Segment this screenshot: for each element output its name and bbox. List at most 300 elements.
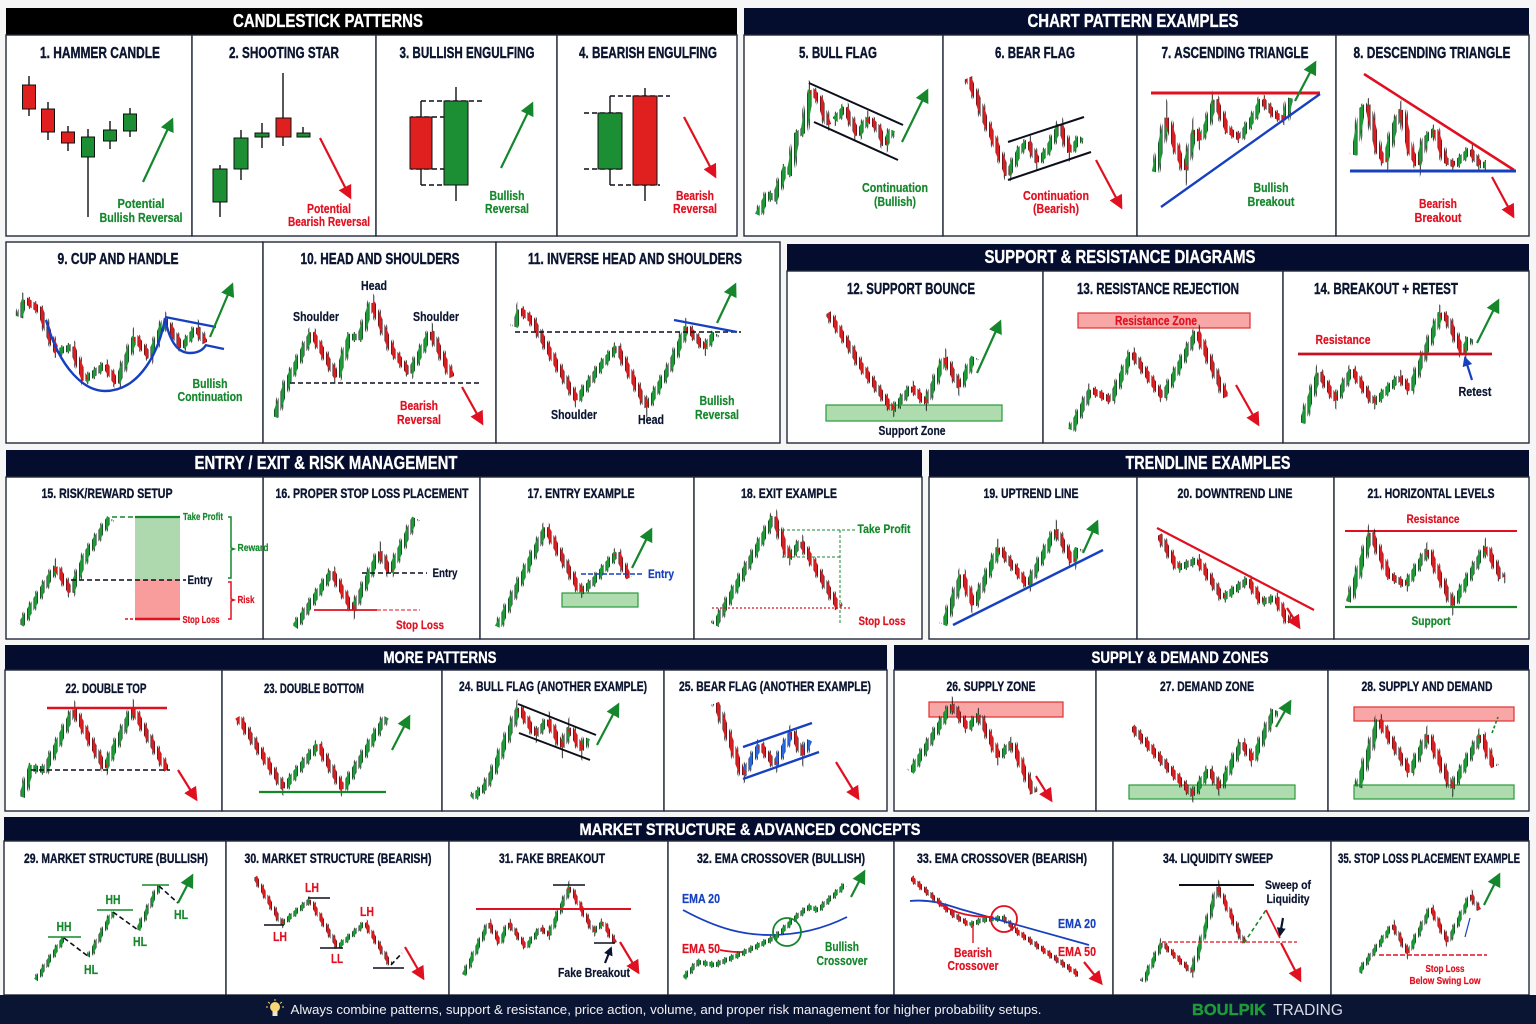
ema 50 curve	[937, 902, 993, 917]
panel: entry example	[480, 477, 694, 639]
label: Bullish	[1254, 180, 1289, 195]
label	[862, 180, 928, 209]
trend line	[1157, 528, 1314, 610]
title: 30. MARKET STRUCTURE (BEARISH)	[244, 850, 432, 866]
panel: demand zone	[1096, 670, 1328, 811]
crossover circle	[991, 906, 1017, 932]
title: 14. BREAKOUT + RETEST	[1314, 281, 1458, 298]
heading: TRENDLINE EXAMPLES	[1126, 453, 1290, 473]
candles	[944, 530, 1078, 625]
heading	[5, 645, 887, 670]
label	[485, 188, 529, 216]
label: Reversal	[397, 412, 441, 427]
panel: uptrend line	[929, 477, 1137, 639]
label: Reversal	[673, 201, 717, 216]
label: Breakout	[1248, 194, 1295, 209]
zone	[562, 593, 638, 607]
arrow	[1295, 63, 1315, 101]
label: Below Swing Low	[1410, 976, 1481, 987]
label: Sweep of	[1265, 878, 1312, 892]
label	[1023, 188, 1089, 216]
resistance zone: Resistance Zone	[1115, 313, 1197, 328]
arrow	[1484, 875, 1499, 905]
panel: market structure bullish	[4, 841, 226, 995]
panel: trendline examples	[929, 450, 1529, 639]
title: 26. SUPPLY ZONE	[946, 678, 1036, 694]
neckline	[515, 331, 741, 333]
label: Continuation	[178, 389, 243, 404]
high level	[1179, 884, 1254, 886]
crossover circle	[773, 918, 801, 946]
zones	[1354, 707, 1514, 799]
arrow	[1276, 702, 1290, 727]
title: 33. EMA CROSSOVER (BEARISH)	[917, 850, 1087, 866]
label: Bearish	[400, 398, 438, 413]
panel: breakout and retest	[1283, 271, 1529, 443]
candles	[715, 517, 839, 625]
title: 34. LIQUIDITY SWEEP	[1163, 850, 1273, 866]
panel: support bounce	[787, 271, 1043, 443]
candles	[515, 310, 715, 407]
panel: exit example	[694, 477, 922, 639]
candles	[1159, 535, 1289, 623]
label: Crossover	[816, 953, 868, 968]
stop line	[1379, 954, 1487, 956]
candles	[584, 88, 670, 201]
label	[1248, 180, 1295, 209]
candles	[716, 703, 809, 775]
stop loss label: Stop Loss	[396, 618, 444, 632]
arrow	[620, 942, 638, 972]
retest arrow	[1465, 358, 1472, 380]
panel: fake breakout	[449, 841, 668, 995]
heading: SUPPLY & DEMAND ZONES	[1092, 648, 1268, 667]
risk bracket: Risk	[238, 595, 255, 606]
candles	[1132, 710, 1275, 795]
neckline	[290, 382, 479, 384]
ema 20 curve	[910, 901, 1089, 945]
sweep path	[1244, 910, 1280, 943]
title: 31. FAKE BREAKOUT	[499, 850, 605, 866]
zone	[1129, 785, 1295, 799]
resistance label: Resistance	[1316, 332, 1370, 347]
swing labels: LH	[305, 880, 319, 895]
heading: ENTRY / EXIT & RISK MANAGEMENT	[194, 453, 458, 473]
title: 28. SUPPLY AND DEMAND	[1362, 678, 1492, 694]
candles	[1359, 895, 1479, 972]
stop line	[712, 607, 851, 609]
target lines	[777, 530, 857, 625]
panel: ema crossover bearish	[894, 841, 1113, 995]
resistance line	[476, 908, 631, 910]
title: 15. RISK/REWARD SETUP	[42, 485, 172, 501]
panel: reversal patterns row	[6, 242, 780, 443]
swing dashes	[64, 886, 178, 957]
title: 1. HAMMER CANDLE	[40, 45, 160, 62]
label: Bullish Reversal	[100, 210, 182, 225]
label: Stop Loss	[1426, 964, 1465, 975]
arrow	[851, 872, 864, 897]
support zone	[826, 405, 1002, 421]
brand: TRADING	[1273, 1002, 1343, 1019]
support label: Support	[1412, 614, 1450, 628]
title: 19. UPTREND LINE	[984, 485, 1078, 501]
arrow	[1281, 943, 1300, 980]
ema labels: EMA 50	[682, 941, 720, 956]
feature labels: Head	[638, 412, 664, 427]
title: 23. DOUBLE BOTTOM	[264, 680, 364, 696]
candles	[1302, 313, 1470, 423]
heading: MARKET STRUCTURE & ADVANCED CONCEPTS	[580, 820, 920, 839]
label: Bullish	[825, 939, 859, 954]
title: 2. SHOOTING STAR	[229, 45, 339, 62]
heading	[929, 450, 1529, 477]
swing labels: HL	[133, 934, 147, 949]
panel: candlestick patterns	[6, 8, 737, 236]
feature labels: Shoulder	[413, 309, 459, 324]
arrow	[632, 530, 651, 568]
title: 32. EMA CROSSOVER (BULLISH)	[697, 850, 865, 866]
candles	[1143, 887, 1244, 982]
brand: BOULPIK	[1192, 1002, 1266, 1019]
title: 29. MARKET STRUCTURE (BULLISH)	[24, 850, 208, 866]
level labels: Take Profit	[858, 522, 911, 536]
label: Bullish	[490, 188, 525, 203]
label	[288, 201, 370, 229]
candles	[911, 878, 1079, 975]
candles	[498, 528, 629, 627]
arrow	[1236, 385, 1258, 424]
brand	[1192, 1002, 1343, 1019]
flag lines	[518, 704, 596, 760]
resistance line	[47, 707, 167, 709]
label: Crossover	[948, 958, 998, 973]
ema 50 curve	[720, 950, 743, 952]
arrow	[405, 947, 423, 978]
heading: CHART PATTERN EXAMPLES	[1028, 11, 1238, 31]
candles	[828, 313, 974, 410]
risk bracket	[228, 582, 255, 619]
ema labels: EMA 20	[1058, 916, 1096, 931]
trend line	[953, 550, 1103, 625]
candles	[472, 708, 587, 798]
arrow	[1083, 522, 1097, 553]
heading: candlestick patterns: CANDLESTICK PATTERNS	[233, 11, 423, 31]
label	[178, 376, 243, 404]
panel: more patterns	[5, 645, 887, 811]
support line	[259, 791, 386, 793]
label	[1414, 196, 1462, 225]
entry label: Entry	[648, 567, 674, 581]
arrow	[1096, 160, 1121, 207]
retest label: Retest	[1458, 384, 1492, 399]
heading	[894, 645, 1529, 670]
candles	[295, 518, 415, 627]
arrow	[717, 285, 735, 323]
panel: bearish engulfing	[557, 35, 737, 236]
title: 17. ENTRY EXAMPLE	[528, 485, 634, 501]
reward bracket	[228, 517, 268, 578]
level labels: Stop Loss	[858, 614, 906, 628]
swing labels	[56, 892, 188, 977]
candles	[21, 518, 110, 625]
label	[695, 393, 739, 422]
label: Bearish	[1419, 196, 1457, 211]
swing labels: HH	[106, 892, 120, 907]
arrow	[1477, 301, 1498, 343]
candles	[238, 717, 386, 789]
candles	[1071, 332, 1226, 430]
feature labels: Shoulder	[551, 407, 597, 422]
entry marker	[1465, 918, 1470, 937]
ema labels: EMA 20	[682, 891, 720, 906]
panel: descending triangle	[1336, 35, 1529, 236]
swing labels: HL	[174, 907, 188, 922]
panel: bull flag	[744, 35, 943, 236]
candles	[213, 73, 310, 217]
resistance label: Resistance	[1406, 512, 1460, 526]
title: 18. EXIT EXAMPLE	[741, 485, 837, 501]
label: Bullish	[192, 376, 228, 391]
panel: supply zone	[894, 670, 1096, 811]
panel: horizontal levels	[1334, 477, 1529, 639]
flag lines	[809, 83, 903, 160]
swing labels: HL	[84, 962, 98, 977]
flag lines	[1008, 117, 1091, 180]
panel: support and resistance diagrams	[787, 244, 1529, 443]
arrow	[178, 876, 192, 903]
candles	[22, 709, 167, 797]
title: 5. BULL FLAG	[799, 45, 877, 62]
label: Potential	[118, 196, 164, 211]
panel: cup and handle	[6, 242, 263, 443]
label: (Bearish)	[1033, 201, 1079, 216]
panel: entry exit and risk management	[6, 450, 922, 639]
arrow	[1492, 177, 1513, 216]
arrow	[1287, 608, 1299, 627]
panel: supply and demand zones	[894, 645, 1529, 811]
arrow	[836, 762, 858, 798]
candles	[911, 705, 1034, 793]
pointer	[972, 923, 974, 943]
ema labels	[1058, 916, 1096, 959]
arrow	[1036, 776, 1051, 800]
footer note: Always combine patterns, support & resistance, price action, volume, and proper risk management for higher probability setups.	[290, 1002, 1042, 1017]
label: Reversal	[485, 201, 529, 216]
label	[100, 196, 182, 225]
candles	[1358, 720, 1494, 788]
label: Reversal	[695, 407, 739, 422]
arrow	[902, 91, 927, 142]
reward bracket: Reward	[238, 543, 268, 554]
level labels: Entry	[188, 573, 213, 587]
cup curve and handle lines	[46, 317, 224, 391]
title: 22. DOUBLE TOP	[66, 680, 146, 696]
label: (Bullish)	[874, 194, 916, 209]
panel: shooting star	[192, 35, 376, 236]
arrow	[392, 717, 409, 750]
reward and risk boxes	[112, 517, 180, 619]
panel: stop loss placement example	[1331, 841, 1529, 995]
candles	[275, 303, 452, 417]
projected breakout	[1492, 717, 1498, 733]
panel: inverse head and shoulders	[496, 242, 780, 443]
panel: market structure bearish	[226, 841, 449, 995]
label: Bearish Reversal	[288, 214, 370, 229]
feature labels: Head	[361, 278, 387, 293]
level labels	[182, 512, 224, 626]
panel: risk reward setup	[6, 477, 268, 639]
feature labels	[551, 407, 664, 427]
title: 16. PROPER STOP LOSS PLACEMENT	[276, 485, 469, 501]
heading: candlestick patterns	[6, 8, 737, 35]
title: 3. BULLISH ENGULFING	[400, 45, 534, 62]
title: 12. SUPPORT BOUNCE	[847, 281, 975, 298]
rising support line	[1161, 94, 1320, 207]
candles	[758, 90, 892, 215]
title: 9. CUP AND HANDLE	[58, 251, 179, 268]
candles	[1354, 105, 1486, 165]
high levels	[48, 885, 169, 937]
support line	[1345, 606, 1517, 608]
arrow	[143, 120, 172, 182]
falling resistance line	[1364, 74, 1514, 170]
label: Potential	[307, 201, 351, 216]
arrow	[684, 117, 715, 176]
entry line	[362, 572, 427, 574]
heading	[787, 244, 1529, 271]
label: Continuation	[1023, 188, 1089, 203]
icon: light bulb	[266, 999, 284, 1016]
level lines	[264, 898, 404, 968]
panel: double top	[5, 670, 222, 811]
feature labels: Shoulder	[293, 309, 339, 324]
title: 4. BEARISH ENGULFING	[579, 45, 717, 62]
panel: liquidity sweep	[1113, 841, 1331, 995]
label: Fake Breakout	[558, 965, 631, 980]
title: 24. BULL FLAG (ANOTHER EXAMPLE)	[459, 678, 647, 694]
stop line	[314, 609, 420, 611]
panel: market structure and advanced concepts	[4, 817, 1529, 995]
arrow	[210, 285, 232, 337]
label	[673, 188, 717, 216]
candles	[410, 87, 482, 201]
swing labels: LH	[360, 904, 374, 919]
label: Continuation	[862, 180, 928, 195]
level labels: Stop Loss	[182, 615, 220, 626]
panel: ema crossover bullish	[668, 841, 894, 995]
panel: hammer candle	[6, 35, 192, 236]
panel: bear flag	[943, 35, 1137, 236]
resistance line	[1345, 530, 1517, 532]
entry line	[581, 573, 644, 575]
candles	[464, 887, 615, 975]
panel: head and shoulders	[263, 242, 496, 443]
label: Bearish	[676, 188, 714, 203]
title: 10. HEAD AND SHOULDERS	[300, 251, 460, 268]
heading: SUPPORT & RESISTANCE DIAGRAMS	[984, 247, 1256, 267]
label: Support Zone	[878, 423, 946, 438]
liquidity level	[1162, 941, 1297, 943]
candles	[19, 300, 205, 383]
label: Liquidity	[1266, 892, 1310, 906]
swing labels	[273, 880, 374, 966]
label	[816, 939, 868, 968]
label: Breakout	[1414, 210, 1462, 225]
panel: chart pattern examples	[744, 8, 1529, 236]
entry label: Entry	[432, 566, 458, 580]
swing labels: LL	[331, 951, 343, 966]
candles	[1349, 533, 1506, 605]
panel: proper stop loss placement	[263, 477, 480, 639]
arrow	[977, 322, 1000, 373]
trend line	[674, 320, 737, 332]
heading	[4, 817, 1529, 841]
title: 21. HORIZONTAL LEVELS	[1368, 485, 1494, 501]
heading	[6, 450, 922, 477]
candles	[1155, 98, 1290, 172]
pointer	[1280, 918, 1283, 935]
swing labels: LH	[273, 929, 287, 944]
swing dash	[391, 953, 402, 965]
flag lines	[743, 723, 819, 779]
ema labels: EMA 50	[1058, 944, 1096, 959]
level labels	[858, 522, 911, 628]
label	[948, 945, 998, 973]
ema labels	[682, 891, 720, 956]
panel: bull flag another example	[442, 670, 664, 811]
label	[1410, 964, 1481, 987]
heading	[744, 8, 1529, 35]
zone	[929, 702, 1063, 717]
panel: bear flag another example	[664, 670, 887, 811]
candles	[968, 78, 1081, 175]
feature labels	[293, 278, 459, 324]
title: 13. RESISTANCE REJECTION	[1077, 281, 1239, 298]
title: 11. INVERSE HEAD AND SHOULDERS	[528, 251, 742, 268]
resistance line	[1298, 353, 1492, 355]
arrow	[178, 770, 196, 799]
title: 7. ASCENDING TRIANGLE	[1162, 45, 1309, 62]
candles	[22, 76, 136, 217]
resistance line	[1151, 92, 1320, 94]
neckline	[31, 769, 170, 771]
arrow	[1084, 962, 1101, 983]
arrow	[320, 138, 350, 197]
footer bar	[0, 995, 1536, 1024]
panel: downtrend line	[1137, 477, 1334, 639]
label: Bullish	[700, 393, 735, 408]
title: 6. BEAR FLAG	[995, 45, 1075, 62]
heading: MORE PATTERNS	[384, 648, 496, 667]
arrow	[597, 705, 618, 745]
candles	[255, 877, 391, 965]
label	[397, 398, 441, 427]
title: 25. BEAR FLAG (ANOTHER EXAMPLE)	[679, 678, 871, 694]
label	[1265, 878, 1312, 906]
panel: supply and demand	[1328, 670, 1529, 811]
level labels: Take Profit	[183, 512, 224, 523]
panel: double bottom	[222, 670, 442, 811]
panel: resistance rejection	[1043, 271, 1283, 443]
candles	[684, 885, 845, 978]
ema 20 curve	[683, 910, 847, 935]
title: 20. DOWNTREND LINE	[1178, 485, 1292, 501]
arrow	[462, 387, 482, 423]
swing labels: HH	[56, 919, 72, 934]
resistance zone	[1078, 313, 1250, 328]
title: 27. DEMAND ZONE	[1160, 678, 1254, 694]
